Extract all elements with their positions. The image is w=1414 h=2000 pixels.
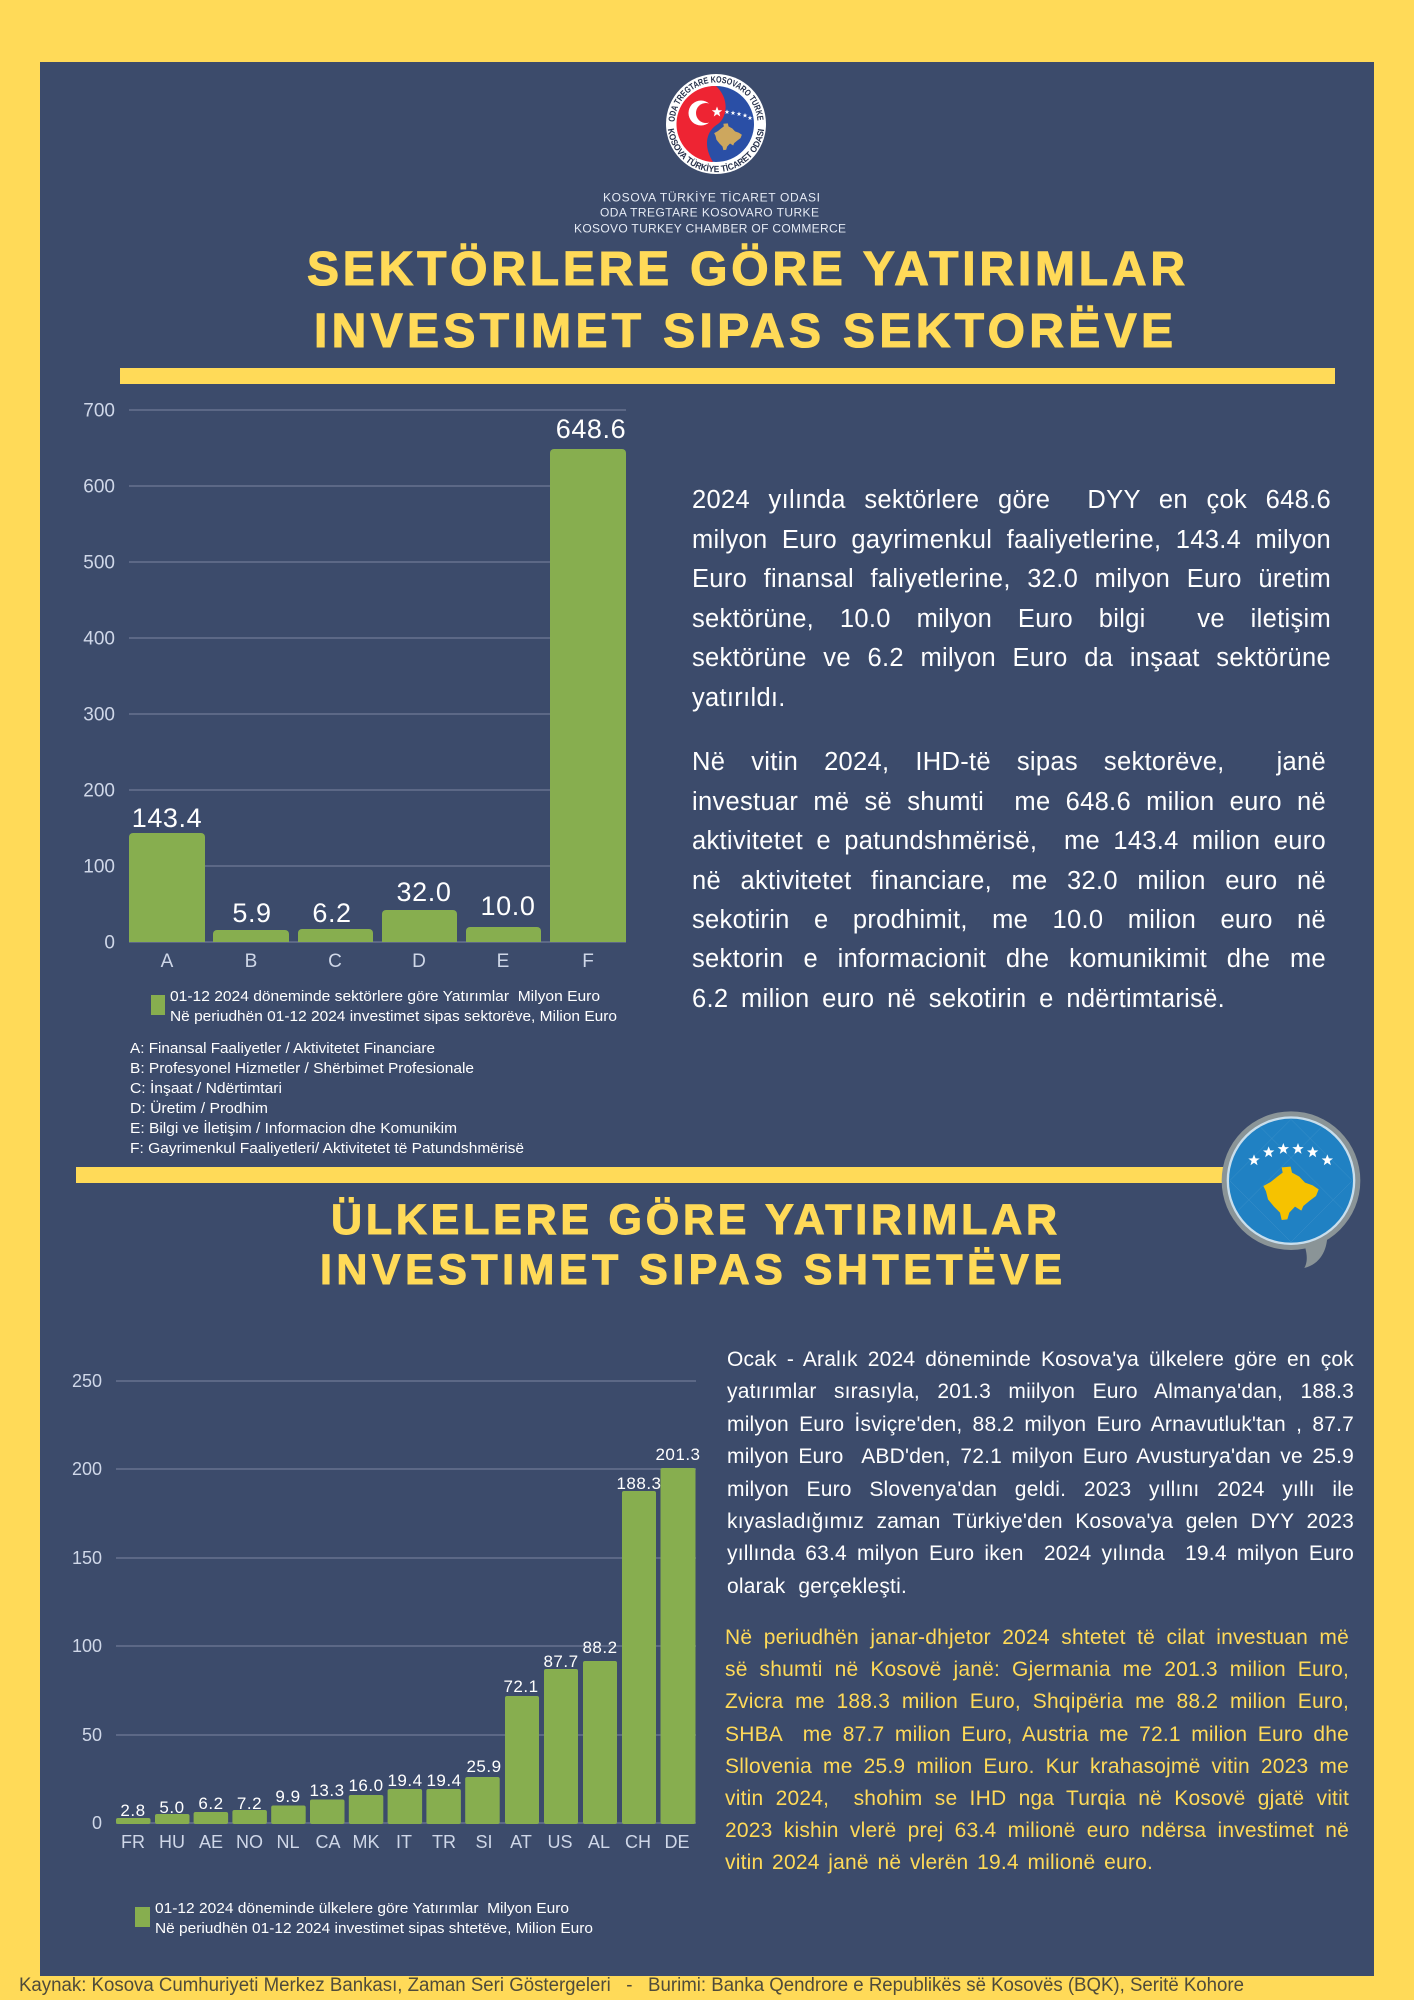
bar chart: investments by sector: 143.4 [132, 803, 202, 833]
bar chart: investments by sector: 0 [104, 932, 115, 954]
bar chart: investments by country: IT [396, 1832, 412, 1852]
sector key: C: İnşaat / Ndërtimtari [130, 1079, 282, 1097]
text block: country summary Albanian: SHBA me 87.7 milion Euro, Austria me 72.1 milion Euro dhe [725, 1723, 1349, 1746]
text block: sector summary Albanian: Në vitin 2024, IHD-të sipas sektorëve, janë [692, 748, 1326, 776]
bar chart: investments by sector: 700 [83, 400, 115, 422]
bar chart: investments by sector: 32.0 [397, 877, 451, 907]
bar chart: investments by country: DE [664, 1832, 690, 1852]
text block: sector summary Turkish: sektörüne ve 6.2 milyon Euro da inşaat sektörüne [692, 644, 1331, 672]
bar chart: investments by country: 25.9 [466, 1757, 502, 1776]
source footer: Kaynak: Kosova Cumhuriyeti Merkez Bankası, Zaman Seri Göstergeleri - Burimi: Banka Qendrore e Republikës së Kosovës (BQK), Seritë Kohore [19, 1975, 1244, 1996]
legend: countries [135, 1900, 593, 1937]
bar chart: investments by country: FR [121, 1832, 145, 1852]
text block: country summary Albanian: vitin 2024, shohim se IHD nga Turqia në Kosovë gjatë vitit [725, 1787, 1349, 1810]
text block: sector summary Albanian: investuar më së shumti me 648.6 milion euro në [692, 788, 1326, 816]
bar chart: investments by country: 200 [72, 1459, 102, 1479]
text block: country summary Turkish [727, 1348, 1354, 1598]
text block: country summary Turkish: yıllında 63.4 milyon Euro iken 2024 yılında 19.4 milyon Euro [727, 1542, 1354, 1565]
legend: countries: 01-12 2024 döneminde ülkelere göre Yatırımlar Milyon Euro [155, 1900, 569, 1917]
bar chart: investments by country: 19.4 [426, 1771, 462, 1790]
bar chart: investments by country: 5.0 [159, 1798, 185, 1817]
text block: sector summary Turkish [692, 486, 1331, 712]
bar chart: investments by country: 2.8 [120, 1801, 146, 1820]
bar chart: investments by country: 19.4 [387, 1771, 423, 1790]
bar chart: investments by country: 16.0 [348, 1776, 384, 1795]
bar chart: investments by country: 201.3 [655, 1445, 701, 1464]
text block: country summary Turkish: yatırımlar sırasıyla, 201.3 miilyon Euro Almanya'dan, 188.3 [727, 1380, 1354, 1403]
bar chart: investments by sector: E [497, 951, 509, 972]
bar chart: investments by country: MK [352, 1832, 380, 1852]
bar chart: investments by country: 88.2 [582, 1638, 618, 1657]
text block: country summary Albanian: 2023 kishin vlerë prej 63.4 milionë euro ndërsa investimet në [725, 1819, 1349, 1842]
bar chart: investments by sector: 500 [83, 552, 115, 574]
bar chart: investments by sector [83, 400, 626, 972]
bar chart: investments by country: HU [159, 1832, 185, 1852]
bar chart: investments by country: CA [315, 1832, 341, 1852]
bar chart: investments by country: TR [432, 1832, 456, 1852]
bar chart: investments by sector: 6.2 [312, 898, 352, 928]
bar chart: investments by country: NO [236, 1832, 263, 1852]
organisation names: KOSOVO TURKEY CHAMBER OF COMMERCE [574, 222, 846, 236]
bar chart: investments by sector: 400 [83, 628, 115, 650]
text block: country summary Turkish: milyon Euro İsviçre'den, 88.2 milyon Euro Arnavutluk'tan , 87.7 [727, 1413, 1354, 1436]
bar chart: investments by sector: F [582, 951, 594, 972]
bar chart: investments by country: AL [588, 1832, 610, 1852]
bar chart: investments by sector: C [328, 951, 342, 972]
text block: country summary Albanian: Zvicra me 188.3 milion Euro, Shqipëria me 88.2 milion Euro, [725, 1690, 1349, 1713]
bar chart: investments by sector: 10.0 [481, 891, 535, 921]
sector key: A: Finansal Faaliyetler / Aktivitetet Financiare [130, 1040, 435, 1057]
bar chart: investments by country: 9.9 [275, 1787, 301, 1806]
text block: country summary Turkish: milyon Euro ABD'den, 72.1 milyon Euro Avusturya'dan ve 25.9 [727, 1445, 1354, 1468]
bar chart: investments by sector: 600 [83, 476, 115, 498]
bar chart: investments by sector: 300 [83, 704, 115, 726]
title: countries: INVESTIMET SIPAS SHTETËVE [320, 1246, 1062, 1294]
divider bar top [120, 368, 1335, 384]
bar chart: investments by country: 100 [72, 1636, 102, 1656]
bar chart: investments by country [72, 1371, 701, 1852]
bar chart: investments by country: 50 [82, 1725, 102, 1745]
text block: sector summary Albanian: aktivitetet e patundshmërisë, me 143.4 milion euro [692, 827, 1326, 855]
logo: chamber of commerce seal: KOSOVA TÜRKİYE TİCARET ODASI [668, 128, 764, 172]
bar chart: investments by sector: 5.9 [232, 898, 272, 928]
sector key: E: Bilgi ve İletişim / Informacion dhe Komunikim [130, 1119, 457, 1137]
bar chart: investments by sector: A [161, 951, 174, 972]
text block: country summary Albanian: Në periudhën janar-dhjetor 2024 shtetet të cilat investuan më [725, 1626, 1349, 1649]
bar chart: investments by sector: 100 [83, 856, 115, 878]
bar chart: investments by country: AE [199, 1832, 223, 1852]
text block: sector summary Turkish: yatırıldı. [692, 684, 786, 712]
title: sectors: SEKTÖRLERE GÖRE YATIRIMLAR [307, 243, 1185, 296]
sector key [130, 1040, 524, 1157]
bar chart: investments by country: 0 [92, 1813, 102, 1833]
text block: sector summary Albanian: sektorin e informacionit dhe komunikimit dhe me [692, 945, 1326, 973]
text block: country summary Turkish: olarak gerçekleşti. [727, 1575, 907, 1598]
title: sectors: INVESTIMET SIPAS SEKTORËVE [314, 305, 1173, 358]
text block: country summary Albanian [725, 1626, 1349, 1874]
legend: countries: Në periudhën 01-12 2024 investimet sipas shtetëve, Milion Euro [155, 1920, 593, 1937]
text block: sector summary Albanian: sekotirin e prodhimit, me 10.0 milion euro në [692, 906, 1326, 934]
text block: sector summary Albanian: në aktivitetet financiare, me 32.0 milion euro në [692, 866, 1326, 894]
bar chart: investments by country: 87.7 [543, 1652, 579, 1671]
text block: country summary Turkish: Ocak - Aralık 2024 döneminde Kosova'ya ülkelere göre en çok [727, 1348, 1354, 1371]
text block: country summary Albanian: së shumti në Kosovë janë: Gjermania me 201.3 milion Euro, [725, 1658, 1349, 1681]
bar chart: investments by country: 188.3 [616, 1474, 662, 1493]
bar chart: investments by country: AT [510, 1832, 532, 1852]
logo: chamber of commerce seal [666, 74, 766, 174]
bar chart: investments by country: NL [276, 1832, 300, 1852]
bar chart: investments by sector: B [245, 951, 257, 972]
bar chart: investments by country: 13.3 [309, 1781, 345, 1800]
bar chart: investments by country: US [547, 1832, 573, 1852]
bar chart: investments by sector: D [412, 951, 426, 972]
text block: country summary Turkish: milyon Euro Slovenya'dan geldi. 2023 yıllını 2024 yıllı ile [727, 1478, 1354, 1501]
bar chart: investments by country: SI [475, 1832, 493, 1852]
bar chart: investments by country: 250 [72, 1371, 102, 1391]
divider bar middle [76, 1167, 1226, 1183]
text block: sector summary Albanian: 6.2 milion euro në sekotirin e ndërtimtarisë. [692, 984, 1225, 1012]
title: sectors [307, 243, 1185, 358]
logo: chamber of commerce seal: ODA TREGTARE KOSOVARO TURKE [668, 76, 764, 122]
legend: sectors: Në periudhën 01-12 2024 investimet sipas sektorëve, Milion Euro [170, 1008, 617, 1025]
title: countries [320, 1196, 1062, 1294]
bar chart: investments by country: 150 [72, 1548, 102, 1568]
text block: country summary Albanian: Sllovenia me 25.9 milion Euro. Kur krahasojmë vitin 2023 me [725, 1755, 1349, 1778]
text block: country summary Albanian: vitin 2024 janë në vlerën 19.4 milionë euro. [725, 1851, 1153, 1874]
sector key: D: Üretim / Prodhim [130, 1099, 268, 1117]
bar chart: investments by sector: 648.6 [556, 414, 626, 444]
title: countries: ÜLKELERE GÖRE YATIRIMLAR [331, 1196, 1057, 1244]
organisation names: KOSOVA TÜRKİYE TİCARET ODASI [603, 190, 820, 204]
text block: sector summary Turkish: sektörüne, 10.0 milyon Euro bilgi ve iletişim [692, 604, 1331, 632]
bar chart: investments by sector: 200 [83, 780, 115, 802]
text block: sector summary Albanian [692, 748, 1326, 1012]
bar chart: investments by country: CH [625, 1832, 651, 1852]
sector key: B: Profesyonel Hizmetler / Shërbimet Profesionale [130, 1060, 474, 1077]
bar chart: investments by country: 72.1 [503, 1677, 539, 1696]
organisation names [574, 190, 846, 236]
legend: sectors [151, 988, 617, 1025]
text block: country summary Turkish: kıyasladığımız zaman Türkiye'den Kosova'ya gelen DYY 2023 [727, 1510, 1354, 1533]
text block: sector summary Turkish: milyon Euro gayrimenkul faaliyetlerine, 143.4 milyon [692, 526, 1331, 554]
bar chart: investments by country: 7.2 [237, 1794, 262, 1813]
sector key: F: Gayrimenkul Faaliyetleri/ Aktivitetet të Patundshmërisë [130, 1140, 524, 1157]
icon: Kosovo flag speech bubble [1222, 1111, 1360, 1268]
text block: sector summary Turkish: 2024 yılında sektörlere göre DYY en çok 648.6 [692, 486, 1331, 514]
bar chart: investments by country: 6.2 [198, 1794, 224, 1813]
legend: sectors: 01-12 2024 döneminde sektörlere göre Yatırımlar Milyon Euro [170, 988, 600, 1005]
text block: sector summary Turkish: Euro finansal faliyetlerine, 32.0 milyon Euro üretim [692, 565, 1331, 593]
organisation names: ODA TREGTARE KOSOVARO TURKE [600, 206, 819, 220]
